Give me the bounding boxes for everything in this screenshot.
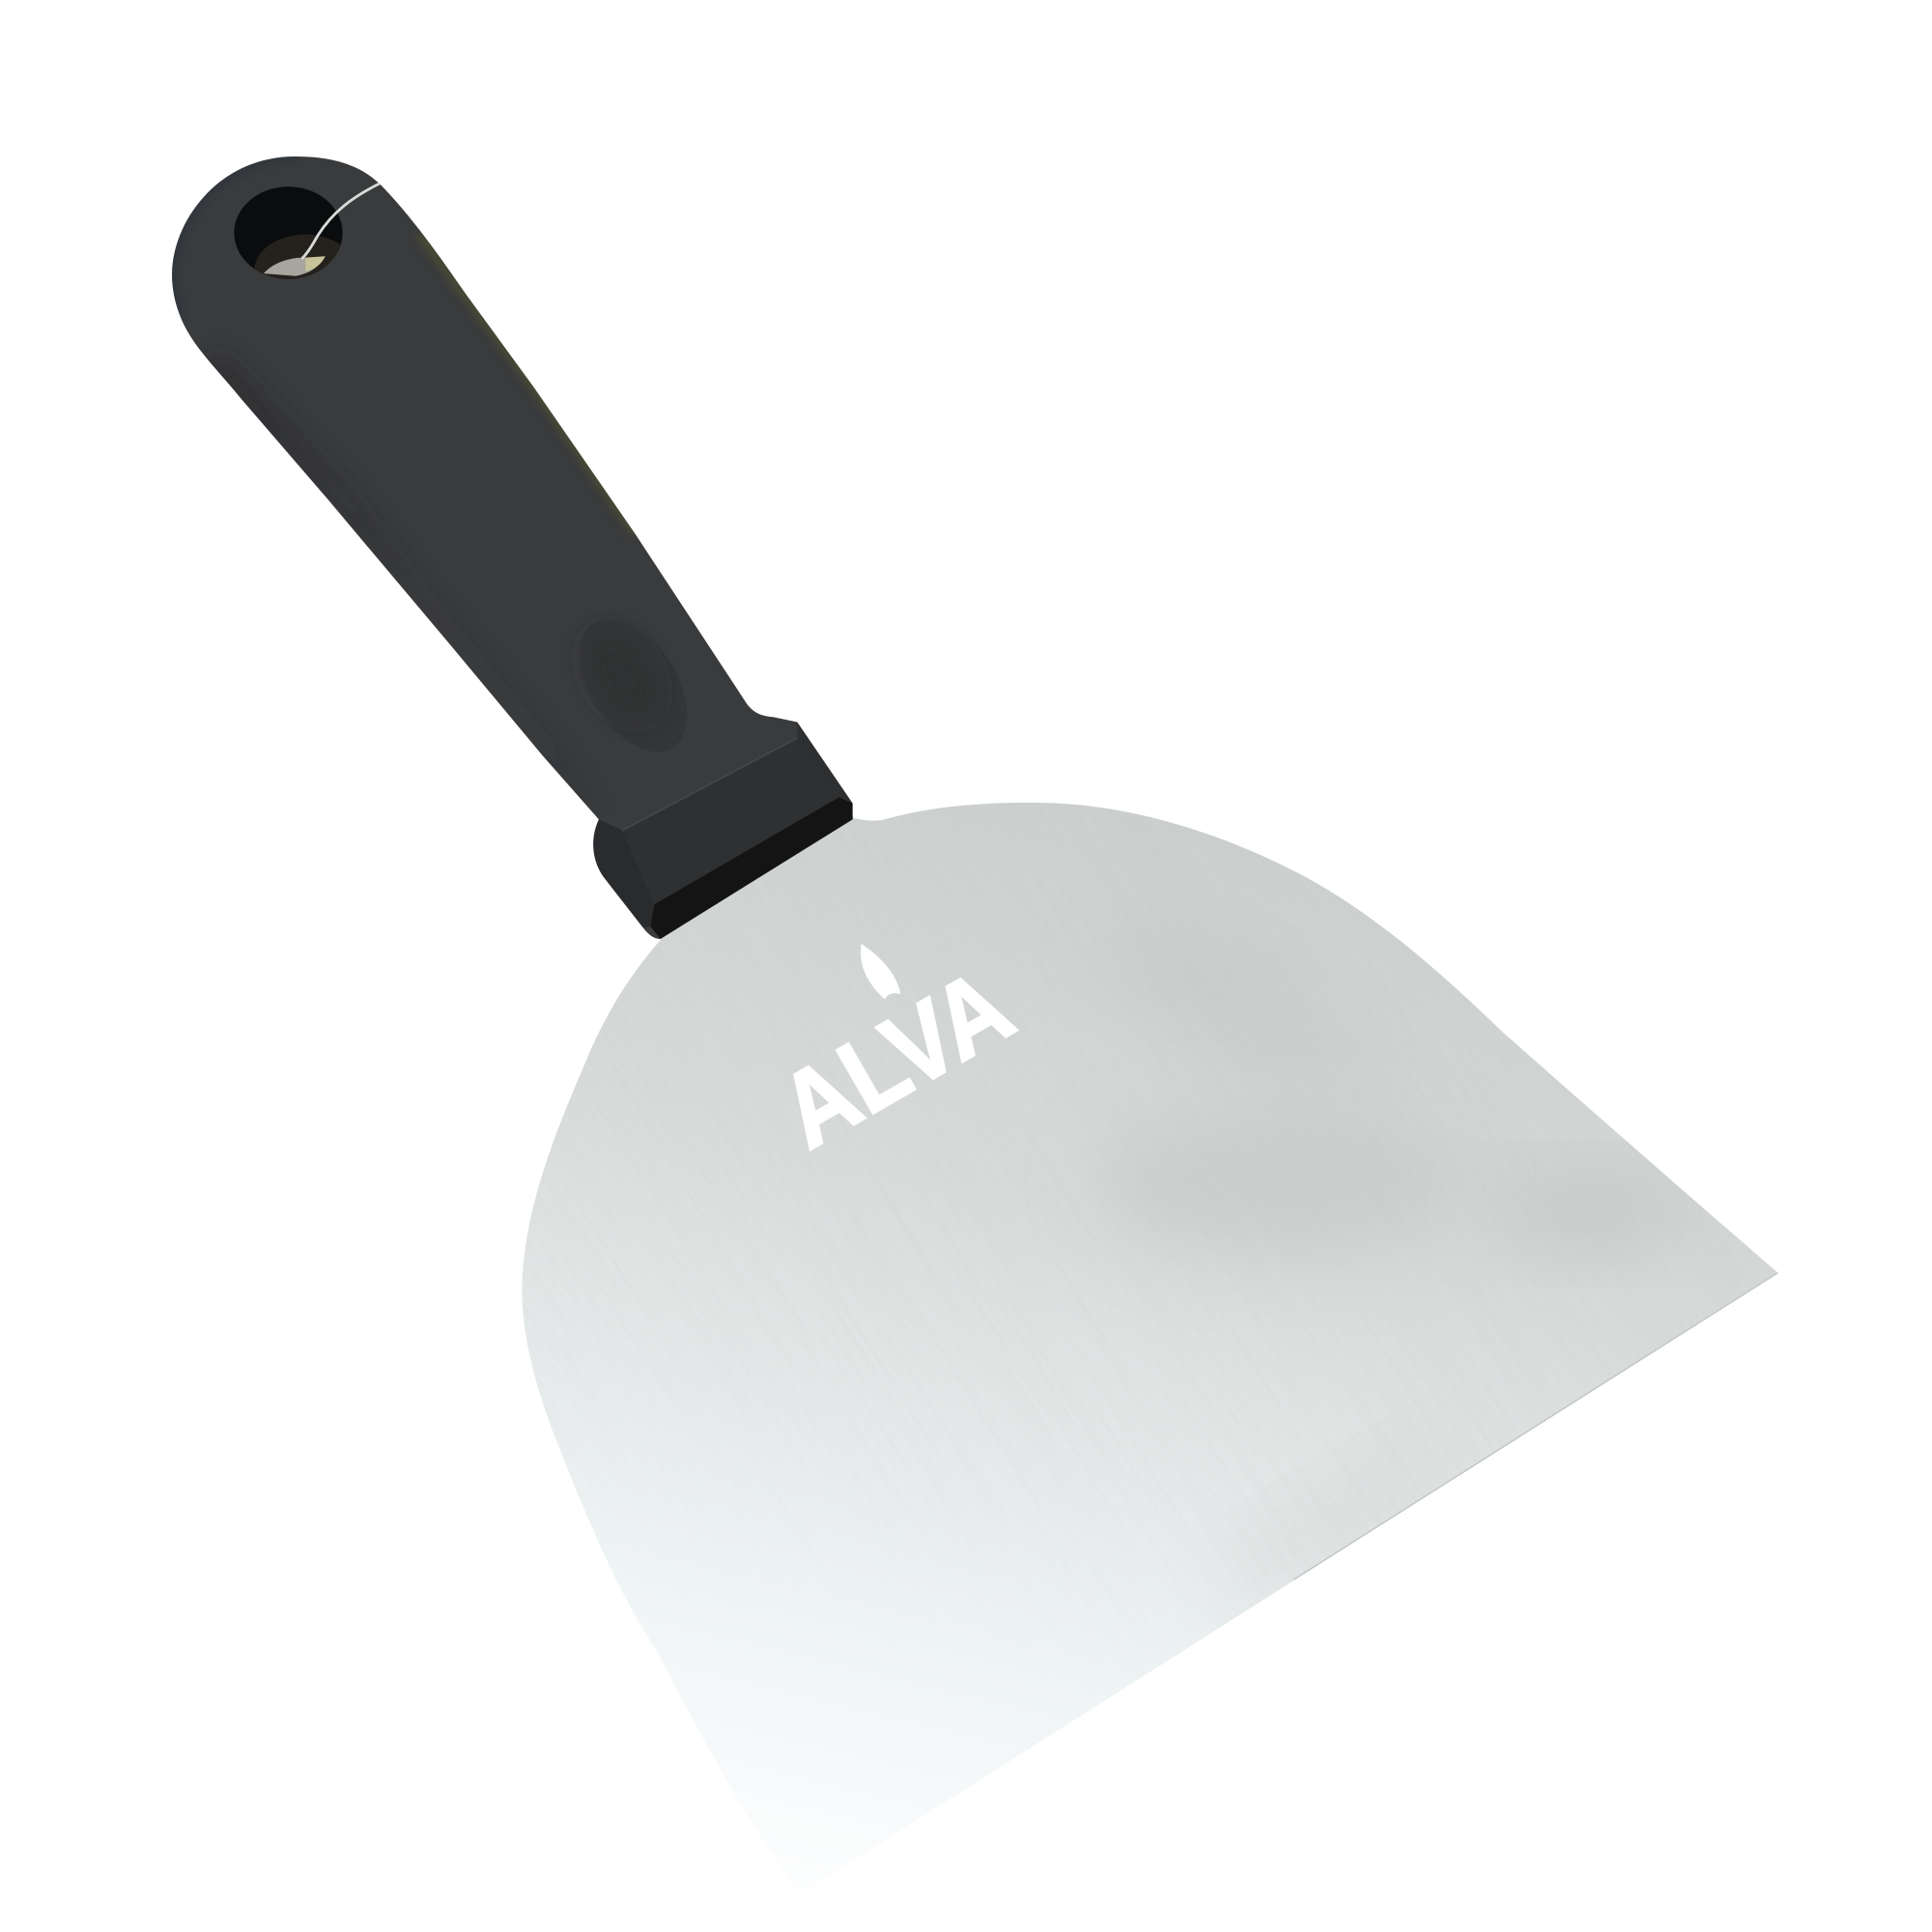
olive highlight on upper edge — [419, 234, 636, 535]
wire loop — [301, 184, 380, 259]
blade — [522, 802, 1778, 1806]
collar box — [622, 738, 839, 904]
thumb dimple — [557, 600, 709, 771]
blade bottom edge — [1293, 1273, 1778, 1579]
logo: ALVA: ALVA — [761, 947, 1031, 1171]
collar shoulder — [593, 819, 654, 927]
blue rim at handle head — [172, 156, 296, 316]
hanging hole — [234, 186, 345, 286]
logo flame — [861, 944, 900, 999]
product image: spatula — [172, 156, 1778, 1806]
collar end face — [650, 797, 853, 939]
shaded lower handle edge — [209, 361, 336, 509]
handle — [172, 156, 853, 939]
